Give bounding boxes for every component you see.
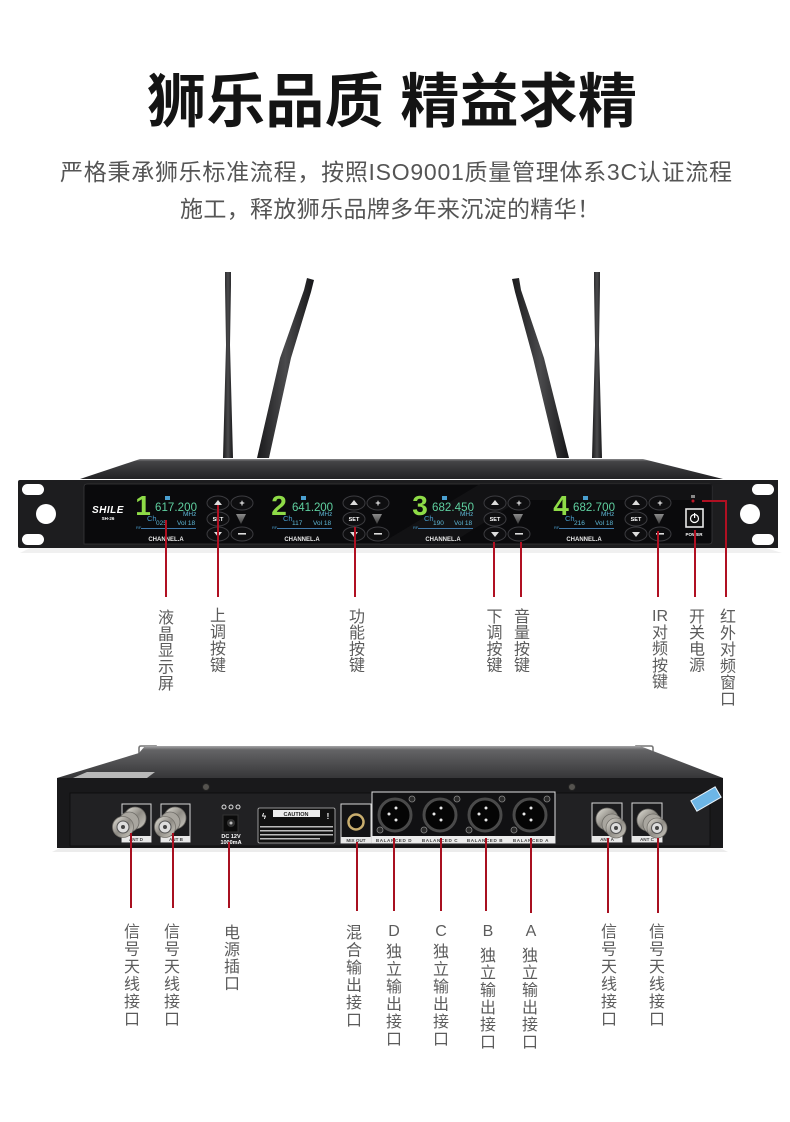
- caution label: CAUTION: [283, 812, 309, 818]
- IR window: [691, 495, 695, 502]
- balanced XLR output group: BALANCED C: [422, 838, 458, 843]
- channel 3 display and buttons: 3: [412, 490, 428, 521]
- channel 4 display and buttons: CHANNEL.A: [566, 537, 602, 543]
- label: volume key: 键: [514, 656, 530, 674]
- label: antenna port 4: 接: [649, 993, 665, 1011]
- channel 1 display and buttons: CHANNEL.A: [148, 537, 184, 543]
- label: antenna port 3: 接: [601, 993, 617, 1011]
- label: B output: 出: [480, 999, 496, 1017]
- label: antenna port 2: 号: [164, 940, 180, 958]
- channel 3 display and buttons: RF: [413, 525, 419, 530]
- label: function key: 键: [349, 656, 365, 674]
- label: IR window: 频: [720, 658, 736, 676]
- label: A output: 立: [522, 964, 538, 982]
- label: IR window: 窗: [720, 674, 736, 692]
- label: D output: 立: [386, 960, 402, 978]
- label: antenna port 3: 天: [601, 959, 617, 976]
- title: 狮乐品质 精益求精: [147, 69, 637, 135]
- label: IR sync key: 频: [652, 640, 668, 658]
- label: antenna port 2: 线: [164, 976, 180, 994]
- channel 2 display and buttons: MHz: [319, 511, 332, 518]
- channel 4 display and buttons: 682.700: [573, 502, 615, 514]
- label: volume key: 量: [514, 625, 530, 642]
- label: antenna port 2: 信: [164, 923, 180, 941]
- balanced XLR output group: [372, 792, 555, 843]
- label: function key: 能: [349, 624, 365, 642]
- rear face: [57, 778, 723, 848]
- subtitle text: [60, 159, 732, 222]
- antenna port D: ANT D: [129, 837, 144, 842]
- label: A output: 接: [522, 1016, 538, 1034]
- channel 2 display and buttons: SET: [349, 517, 360, 523]
- brand logo: SH-26: [102, 516, 115, 521]
- front callout lines: [166, 501, 726, 597]
- channel 1 display and buttons: [135, 490, 253, 543]
- top plate: [80, 459, 723, 479]
- antenna port A: [592, 803, 626, 842]
- blue sticker: [691, 787, 721, 811]
- label: D output: 输: [386, 978, 402, 996]
- DC power jack: 1000mA: [220, 840, 242, 846]
- label: mix output: 口: [346, 1012, 362, 1030]
- label: A output: 输: [522, 982, 538, 1000]
- caution label: [258, 808, 335, 843]
- label: B output: 口: [480, 1034, 496, 1052]
- label: power switch: 源: [689, 656, 705, 674]
- label: IR window: 红: [720, 608, 736, 626]
- label: D output: 接: [386, 1013, 402, 1031]
- brand logo: SHILE: [92, 505, 124, 516]
- channel 3 display and buttons: SET: [490, 517, 501, 523]
- label: IR sync key: 按: [652, 657, 668, 675]
- label: LCD screen: 晶: [158, 626, 174, 644]
- channel 4 display and buttons: MHz: [601, 511, 614, 518]
- inner glass panel: [84, 484, 712, 544]
- channel 1 display and buttons: Ch: [147, 514, 157, 523]
- channel 3 display and buttons: 682.450: [432, 502, 474, 514]
- rear callout lines: [131, 833, 658, 913]
- label: B output: B: [483, 923, 493, 940]
- channel 2 display and buttons: 641.200: [292, 502, 333, 514]
- rear shadow: [52, 848, 728, 852]
- caution label: !: [327, 812, 329, 821]
- label: up key: 按: [210, 640, 226, 658]
- rack tabs: [139, 746, 156, 757]
- label: IR sync key: 对: [652, 624, 668, 642]
- label: power switch: 电: [689, 640, 705, 658]
- channel 3 display and buttons: Vol 18: [454, 520, 472, 527]
- label: antenna port 1: 口: [124, 1012, 140, 1028]
- label: antenna port 2: 接: [164, 993, 180, 1011]
- channel 3 display and buttons: MHz: [460, 511, 473, 518]
- label: antenna port 4: 口: [649, 1012, 665, 1028]
- antenna port C: ANT C: [640, 837, 655, 842]
- label: C output: 接: [433, 1013, 449, 1031]
- label: antenna port 1: 天: [124, 959, 140, 976]
- front shadow: [20, 548, 782, 553]
- label: IR sync key: 键: [652, 673, 668, 691]
- antenna port D: [112, 804, 151, 842]
- label: antenna port 1: 接: [124, 993, 140, 1011]
- label: antenna port 1: 线: [124, 976, 140, 994]
- channel 4 display and buttons: RF: [554, 525, 560, 530]
- channel 3 display and buttons: [412, 490, 530, 543]
- front view of receiver: [18, 459, 782, 553]
- channel 1 display and buttons: 1: [135, 490, 151, 521]
- label: volume key: 按: [514, 640, 530, 658]
- label: power switch: 关: [689, 624, 705, 642]
- label: LCD screen: 示: [158, 660, 174, 676]
- label: C output: 口: [433, 1032, 449, 1048]
- label: D output: D: [388, 923, 400, 940]
- label: D output: 出: [386, 996, 402, 1014]
- label: up key: 键: [210, 656, 226, 674]
- antenna port A: ANT A: [600, 837, 615, 842]
- label: IR window: 外: [720, 624, 736, 642]
- channel 2 display and buttons: RF: [272, 525, 278, 530]
- caution label: ϟ: [262, 812, 267, 821]
- screws: [202, 784, 576, 790]
- label: B output: 独: [480, 947, 496, 965]
- label: antenna port 2: 口: [164, 1012, 180, 1028]
- label: C output: 立: [433, 960, 449, 978]
- antenna port B: ANT B: [169, 837, 184, 842]
- channel 1 display and buttons: RF: [136, 525, 142, 530]
- label: antenna port 3: 号: [601, 940, 617, 958]
- label: volume key: 音: [514, 608, 530, 626]
- sticker on top: [73, 772, 155, 778]
- label: LCD screen: 显: [158, 643, 174, 660]
- label: antenna port 4: 号: [649, 940, 665, 958]
- label: IR window: 口: [720, 692, 736, 708]
- channel 1 display and buttons: 617.200: [155, 502, 197, 514]
- label: down key: 下: [486, 609, 503, 626]
- rear view of receiver: [52, 746, 728, 852]
- label: C output: 出: [433, 996, 449, 1014]
- antennas: [223, 272, 602, 458]
- channel 4 display and buttons: +: [657, 498, 663, 508]
- label: B output: 输: [480, 982, 496, 1000]
- channel 1 display and buttons: 025: [156, 520, 167, 527]
- label: mix output: 合: [346, 942, 362, 960]
- label: function key: 按: [349, 640, 365, 658]
- channel 1 display and buttons: +: [239, 498, 245, 508]
- label: down key: 按: [486, 640, 503, 658]
- channel 1 display and buttons: Vol 18: [177, 520, 195, 527]
- channel 3 display and buttons: Ch: [424, 514, 434, 523]
- channel 4 display and buttons: Vol 18: [595, 520, 613, 527]
- power button: POWER: [685, 532, 703, 537]
- label: antenna port 4: 线: [649, 976, 665, 994]
- label: IR window: 对: [720, 641, 736, 659]
- channel 2 display and buttons: Vol 18: [313, 520, 331, 527]
- channel 4 display and buttons: SET: [631, 517, 642, 523]
- label: A output: A: [526, 923, 537, 940]
- channel 3 display and buttons: CHANNEL.A: [425, 537, 461, 543]
- label: antenna port 3: 线: [601, 976, 617, 994]
- label: mix output: 输: [346, 959, 362, 977]
- label: antenna port 1: 信: [124, 923, 140, 941]
- label: power socket: 口: [224, 976, 240, 993]
- channel 2 display and buttons: +: [375, 498, 381, 508]
- DC power jack: DC 12V: [221, 834, 241, 840]
- channel 2 display and buttons: [271, 490, 389, 543]
- antenna port B: [154, 804, 190, 842]
- antenna port C: [632, 803, 667, 842]
- front faceplate with rack ears: [18, 480, 778, 548]
- label: down key: 调: [486, 624, 503, 642]
- label: power socket: 电: [224, 924, 240, 942]
- label: up key: 调: [210, 624, 226, 642]
- channel 2 display and buttons: 117: [292, 520, 303, 527]
- label: up key: 上: [210, 607, 226, 625]
- label: antenna port 3: 信: [601, 923, 617, 941]
- label: power socket: 源: [224, 941, 240, 959]
- label: antenna port 4: 信: [649, 923, 665, 941]
- label: D output: 口: [386, 1032, 402, 1048]
- DC power jack: [220, 805, 242, 846]
- label: antenna port 3: 口: [601, 1012, 617, 1028]
- label: antenna port 2: 天: [164, 959, 180, 976]
- mix out jack: MIX OUT: [346, 838, 366, 843]
- channel 4 display and buttons: [553, 490, 671, 543]
- label: C output: 独: [433, 943, 449, 961]
- label: B output: 接: [480, 1016, 496, 1034]
- label: antenna port 1: 号: [124, 940, 140, 958]
- label: mix output: 接: [346, 994, 362, 1012]
- channel 2 display and buttons: 2: [271, 490, 287, 521]
- label: D output: 独: [386, 943, 402, 961]
- label: power socket: 插: [224, 958, 240, 976]
- channel 3 display and buttons: +: [516, 498, 522, 508]
- channel 1 display and buttons: SET: [213, 517, 224, 523]
- top plate: [57, 746, 723, 778]
- mix out jack: [341, 804, 371, 843]
- channel 3 display and buttons: 190: [433, 520, 444, 527]
- power button: [685, 509, 703, 537]
- label: antenna port 4: 天: [649, 959, 665, 976]
- channel 2 display and buttons: CHANNEL.A: [284, 537, 320, 543]
- channel 2 display and buttons: Ch: [283, 514, 293, 523]
- brand logo: [92, 505, 124, 521]
- label: B output: 立: [480, 964, 496, 982]
- inner rear panel: [70, 793, 710, 846]
- subtitle text: 严格秉承狮乐标准流程，按照ISO9001质量管理体系3C认证流程: [60, 159, 732, 185]
- label: mix output: 混: [346, 924, 362, 942]
- label: down key: 键: [486, 656, 503, 674]
- label: LCD screen: 液: [158, 609, 174, 627]
- label: IR sync key: IR: [652, 608, 668, 625]
- balanced XLR output group: BALANCED D: [376, 838, 412, 843]
- label: A output: 独: [522, 947, 538, 965]
- label: LCD screen: 屏: [158, 676, 174, 693]
- balanced XLR output group: BALANCED B: [467, 838, 503, 843]
- label: function key: 功: [349, 608, 365, 626]
- channel 4 display and buttons: 216: [574, 520, 585, 527]
- balanced XLR output group: BALANCED A: [513, 838, 549, 843]
- channel 4 display and buttons: 4: [553, 490, 569, 521]
- label: mix output: 出: [346, 976, 362, 994]
- channel 4 display and buttons: Ch: [565, 514, 575, 523]
- channel 1 display and buttons: MHz: [183, 511, 196, 518]
- label: power switch: 开: [689, 609, 705, 626]
- label: C output: 输: [433, 978, 449, 996]
- label: A output: 出: [522, 999, 538, 1017]
- subtitle text: 施工，释放狮乐品牌多年来沉淀的精华！: [180, 196, 600, 222]
- label: A output: 口: [522, 1034, 538, 1052]
- ear holes: [22, 484, 774, 545]
- label: C output: C: [435, 923, 447, 940]
